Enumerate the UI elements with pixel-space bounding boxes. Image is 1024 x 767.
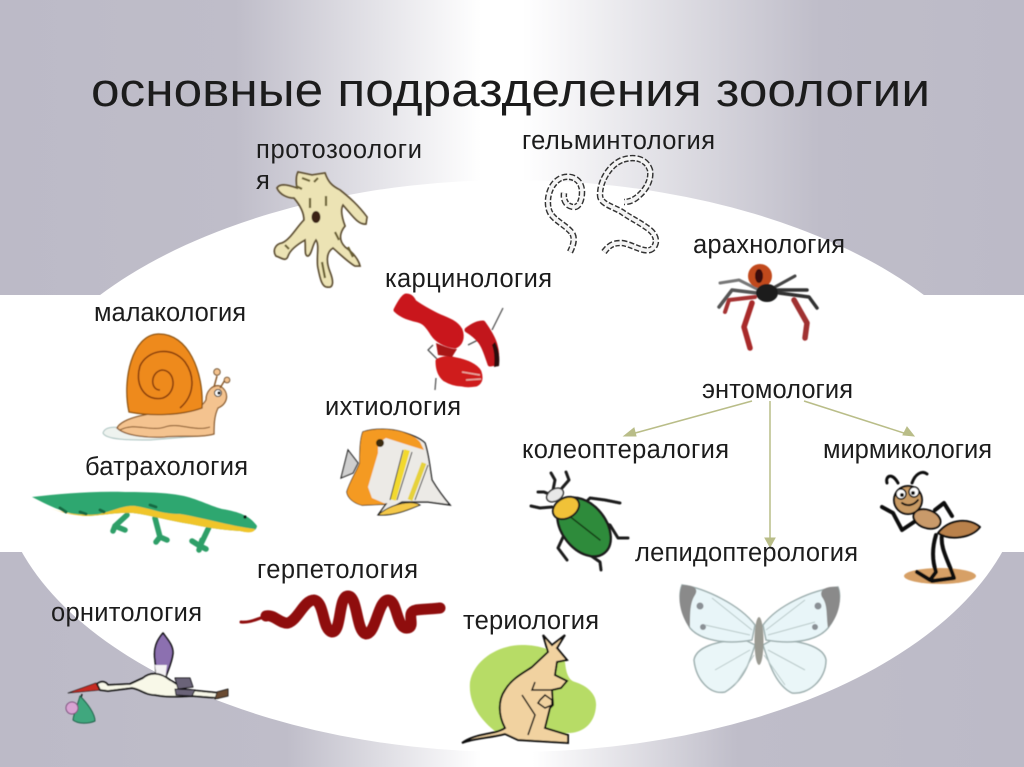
label: колеоптералогия: колеоптералогия	[522, 436, 729, 464]
icon: snail	[103, 334, 230, 440]
icon: butterfly fish	[341, 429, 450, 515]
icon: kangaroo on green blob	[462, 635, 596, 743]
background: top grey band	[0, 0, 1024, 295]
title: основные подразделения зоологии	[91, 63, 930, 116]
label: протозоология: протозоологи	[256, 136, 422, 164]
icon: stork	[66, 633, 228, 723]
label: малакология: малакология	[94, 299, 246, 327]
label: протозоология: я	[256, 167, 270, 195]
label: орнитология: орнитология	[51, 599, 202, 627]
label: лепидоптерология: лепидоптерология	[635, 539, 858, 567]
label: ихтиология: ихтиология	[325, 393, 461, 421]
icon: ant	[882, 472, 980, 584]
label: энтомология: энтомология	[702, 376, 853, 404]
icon: worms	[548, 158, 656, 252]
label: гельминтология: гельминтология	[522, 127, 715, 155]
icon: tick	[719, 264, 817, 348]
icon: snake	[241, 596, 440, 634]
label: териология: териология	[463, 607, 599, 635]
label: мирмикология: мирмикология	[823, 436, 992, 464]
icon: beetle	[531, 472, 628, 570]
label: протозоология	[256, 136, 422, 195]
label: арахнология: арахнология	[693, 231, 845, 259]
label: карцинология: карцинология	[385, 265, 552, 293]
background: white central ellipse	[0, 180, 1024, 752]
icon: butterfly	[680, 585, 840, 693]
background: bottom grey band	[0, 552, 1024, 767]
arrows from энтомология	[624, 401, 914, 547]
icon: lobster	[396, 296, 503, 390]
label: батрахология: батрахология	[85, 453, 248, 481]
icon: newt	[32, 492, 257, 550]
icon: amoeba	[274, 172, 367, 287]
label: герпетология: герпетология	[257, 556, 418, 584]
